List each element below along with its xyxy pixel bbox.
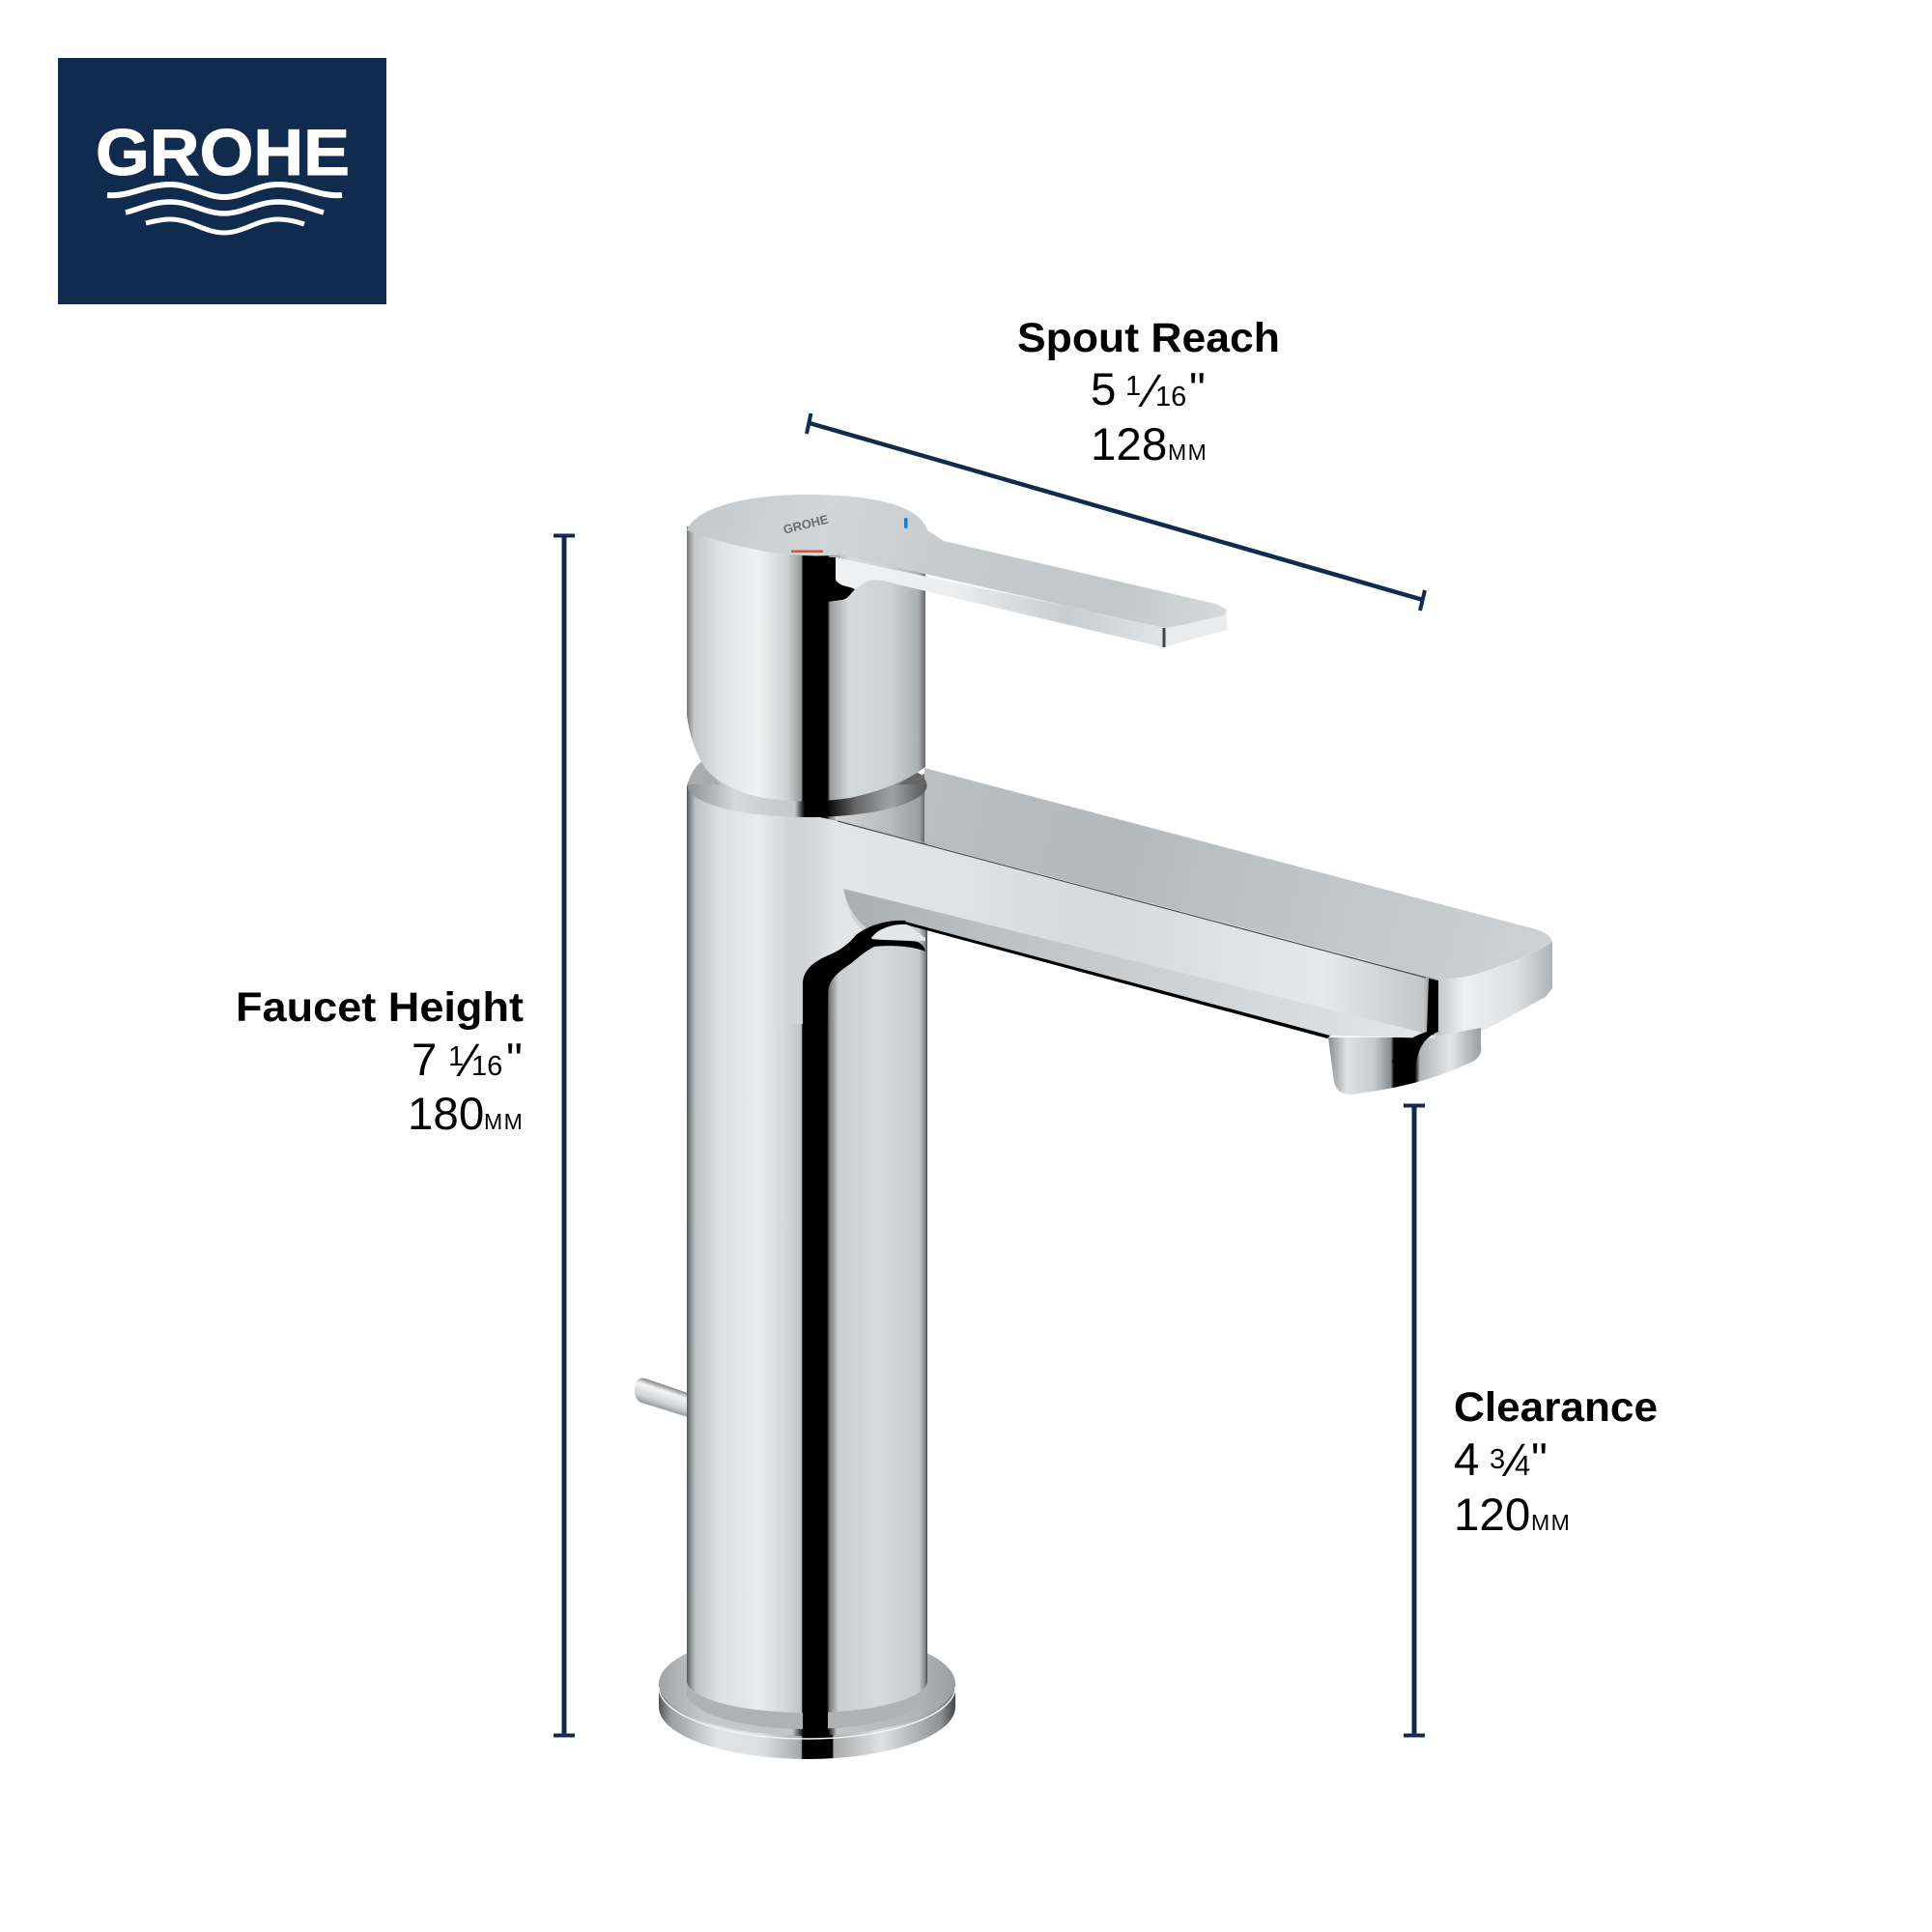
- value in inches: 1: [1125, 371, 1141, 402]
- handle black reflection top: [804, 557, 855, 618]
- lever tip edge: [1163, 628, 1165, 647]
- spout lower black edge: [905, 922, 1330, 1038]
- value in millimetres: MM: [484, 1109, 524, 1134]
- spout top edge line: [838, 821, 1426, 978]
- dimension line: spout reach: [807, 413, 1425, 611]
- value in inches: ⁄: [456, 1036, 480, 1087]
- base disc: [659, 1632, 955, 1759]
- value in inches: ⁄: [1138, 366, 1162, 417]
- mini logo on cap: GROHE: [781, 512, 830, 537]
- value in inches: ": [1531, 1435, 1548, 1486]
- value in millimetres: MM: [1168, 440, 1208, 465]
- spout underside: [843, 889, 1435, 1038]
- handle cylinder: [687, 526, 925, 802]
- black reflection curve: [803, 921, 925, 1063]
- dimension line: clearance: [1404, 1104, 1425, 1736]
- lever front face: [828, 557, 1166, 647]
- dimension label: Faucet Height: [236, 984, 524, 1140]
- value in inches: 4: [1454, 1435, 1479, 1486]
- logo: GROHE: [58, 58, 386, 304]
- logo wordmark: GROHE: [96, 116, 350, 189]
- cold indicator mark: [904, 518, 908, 528]
- spout top surface: [924, 768, 1552, 979]
- dimension label: Clearance: Clearance: [1454, 1384, 1658, 1431]
- value in inches: 4: [1515, 1451, 1530, 1482]
- value in millimetres: 120: [1454, 1490, 1530, 1541]
- value in inches: 3: [1490, 1444, 1505, 1475]
- spout corner black edge: [1392, 979, 1438, 1063]
- value in millimetres: MM: [1531, 1510, 1571, 1535]
- value in inches: ": [506, 1035, 523, 1086]
- dimension label: Clearance: [1454, 1384, 1658, 1541]
- dimension line: faucet height: [554, 534, 575, 1736]
- arch highlight: [871, 924, 925, 941]
- spout side face: [1435, 942, 1552, 1041]
- value in inches: 16: [1155, 382, 1186, 412]
- value in inches: 1: [448, 1041, 464, 1072]
- value in millimetres: 128: [1091, 419, 1167, 470]
- lever tip face: [1163, 610, 1227, 647]
- faucet illustration: [635, 495, 1552, 1759]
- hot indicator mark: [791, 551, 823, 553]
- neck and spout front face: [687, 787, 1435, 1036]
- spout back shoulder: [831, 773, 926, 843]
- collar ring: [688, 753, 927, 817]
- value in inches: ⁄: [1501, 1435, 1526, 1487]
- handle cap and lever top surface: [687, 495, 1227, 627]
- value in inches: ": [1189, 364, 1206, 415]
- pop-up drain pin: [635, 1378, 688, 1417]
- dimension label: Spout Reach: Spout Reach: [1017, 315, 1280, 361]
- dimension label: Faucet Height: Faucet Height: [236, 984, 524, 1031]
- value in millimetres: 180: [408, 1089, 484, 1140]
- faucet body column: [687, 785, 927, 1713]
- aerator: [1328, 1028, 1481, 1094]
- value in inches: 5: [1091, 364, 1116, 415]
- value in inches: 16: [471, 1051, 502, 1082]
- logo waves: [107, 185, 342, 233]
- value in inches: 7: [412, 1035, 437, 1086]
- dimension label: Spout Reach: [1017, 315, 1280, 470]
